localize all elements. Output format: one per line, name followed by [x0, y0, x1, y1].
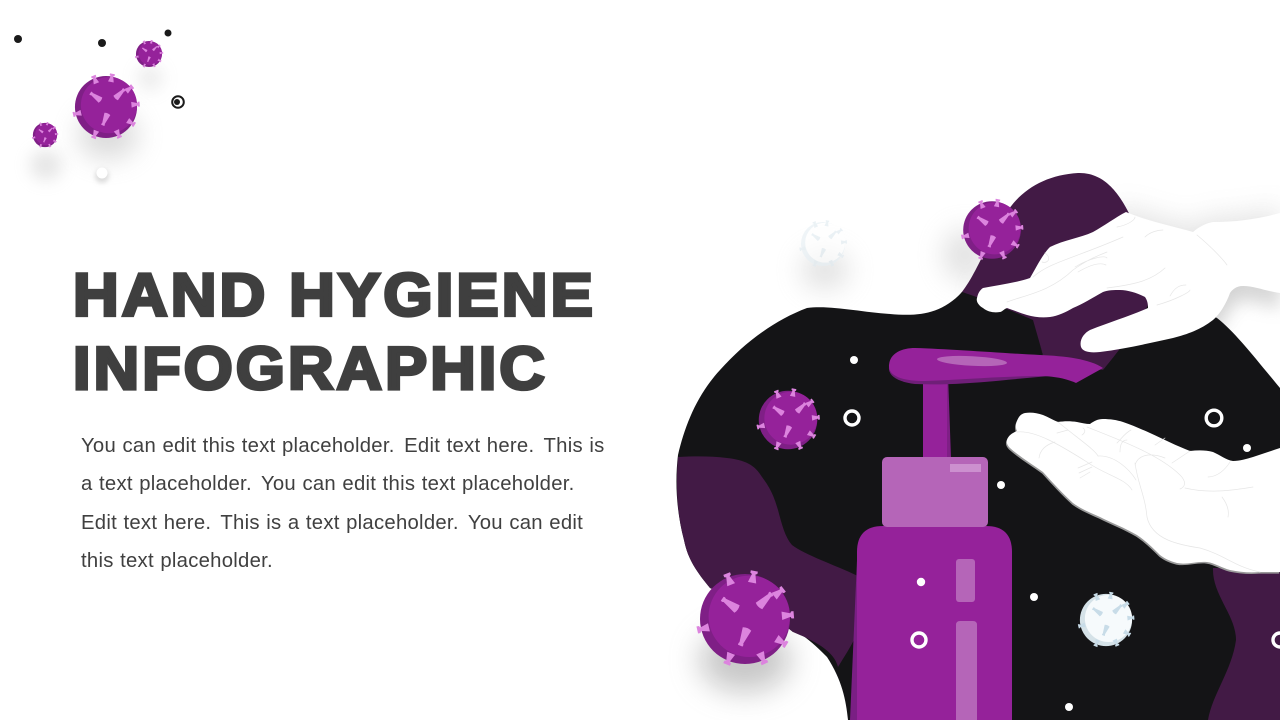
virus: white on black	[1078, 592, 1135, 647]
body text block: Edit text here. This is a text placeholder. You can edit	[81, 512, 583, 534]
white dot with shadow, top left	[95, 168, 109, 183]
pump collar	[882, 457, 988, 527]
body text block	[81, 435, 605, 572]
decorative dark dots, top left	[14, 30, 184, 108]
bottle label highlights	[956, 559, 977, 720]
virus: upper right near hand	[961, 199, 1023, 260]
title: HAND HYGIENE	[73, 262, 596, 328]
body text block: a text placeholder. You can edit this text placeholder.	[81, 473, 575, 495]
soap pump bottle	[850, 348, 1103, 720]
white dots and rings	[845, 356, 1280, 711]
body text block: You can edit this text placeholder. Edit text here. This is	[81, 435, 605, 457]
virus: white faded	[799, 220, 847, 267]
blob: dark purple lower right shape	[1208, 568, 1280, 720]
upper hand	[977, 212, 1280, 352]
blob: black background	[676, 292, 1280, 720]
body text block: this text placeholder.	[81, 550, 273, 572]
blob: dark purple upper shape	[955, 173, 1160, 372]
title	[73, 262, 596, 402]
virus: large top left	[72, 73, 140, 139]
title: INFOGRAPHIC	[73, 335, 548, 402]
virus: small left	[32, 122, 58, 148]
virus: large bottom	[696, 570, 794, 666]
virus: middle on black	[756, 388, 820, 451]
virus: small top	[135, 40, 163, 68]
bottle body	[857, 526, 1012, 720]
lower hand	[1006, 413, 1280, 574]
bottle side shade	[850, 560, 860, 720]
blob: dark purple left shape	[677, 456, 858, 667]
pump stem	[923, 375, 951, 458]
pump head	[889, 348, 1103, 384]
